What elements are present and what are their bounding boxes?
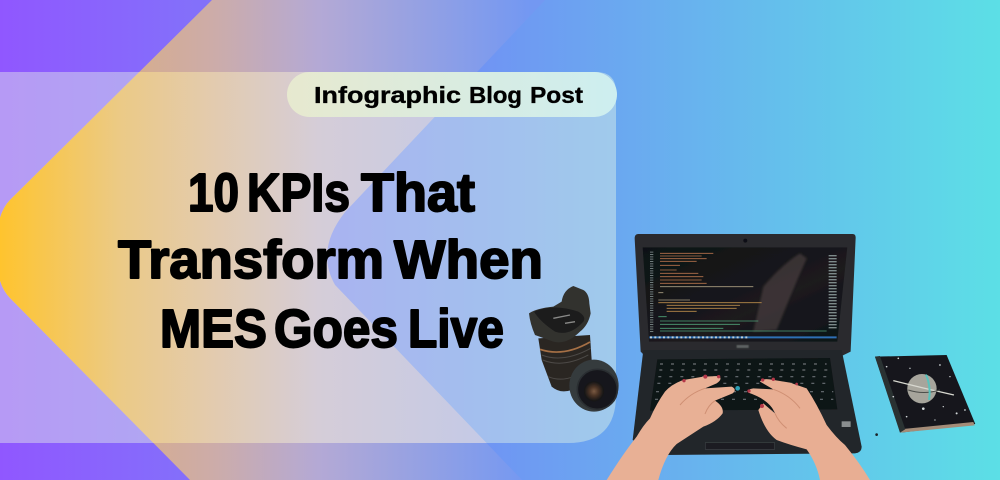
lid <box>635 234 856 356</box>
photo: notebook with planet <box>875 355 975 436</box>
lens cap <box>534 307 584 333</box>
speck <box>875 433 878 436</box>
title: 10 <box>188 163 239 223</box>
key rows <box>655 364 833 399</box>
teal key highlight <box>735 386 740 391</box>
title: Goes <box>274 299 398 359</box>
keyboard <box>650 358 837 411</box>
sticker <box>842 421 851 427</box>
title: KPIs <box>247 163 350 223</box>
right hand and arm <box>748 379 870 480</box>
title: MES <box>160 299 267 359</box>
left hand and arm <box>607 376 735 480</box>
hinge <box>653 351 812 356</box>
screen glare <box>753 253 807 332</box>
pill label: Infographic Blog Post <box>287 72 617 117</box>
pill label: Infographic Blog Post: Post <box>530 82 583 108</box>
brand <box>737 345 749 348</box>
webcam <box>743 239 747 243</box>
trackpad <box>705 443 775 449</box>
code lines <box>649 252 837 337</box>
laptop base <box>633 350 862 455</box>
title: Live <box>408 299 504 359</box>
stars <box>886 357 966 421</box>
photo: camera lenses <box>529 286 619 412</box>
left hand shading <box>680 388 715 414</box>
title <box>118 163 543 359</box>
screen <box>643 247 847 342</box>
pill label: Infographic Blog Post: Blog <box>469 82 522 108</box>
arrow seen through panel <box>0 72 486 443</box>
title: When <box>394 230 543 290</box>
pill label: Infographic Blog Post: Infographic <box>314 82 461 108</box>
lens barrel <box>538 335 592 391</box>
copper ring <box>540 342 590 352</box>
title: Transform <box>118 230 384 290</box>
barrel ribs <box>542 348 591 379</box>
lens hood <box>529 286 591 342</box>
arrow shape: orange chevron <box>0 0 545 480</box>
right hand shading <box>773 389 800 428</box>
translucent panel <box>0 72 616 443</box>
planet <box>893 374 954 403</box>
small lens <box>569 360 619 412</box>
photo: laptop base and hands <box>607 350 870 480</box>
title: That <box>361 163 475 223</box>
nails <box>682 375 798 408</box>
photo: laptop lid <box>635 234 856 356</box>
